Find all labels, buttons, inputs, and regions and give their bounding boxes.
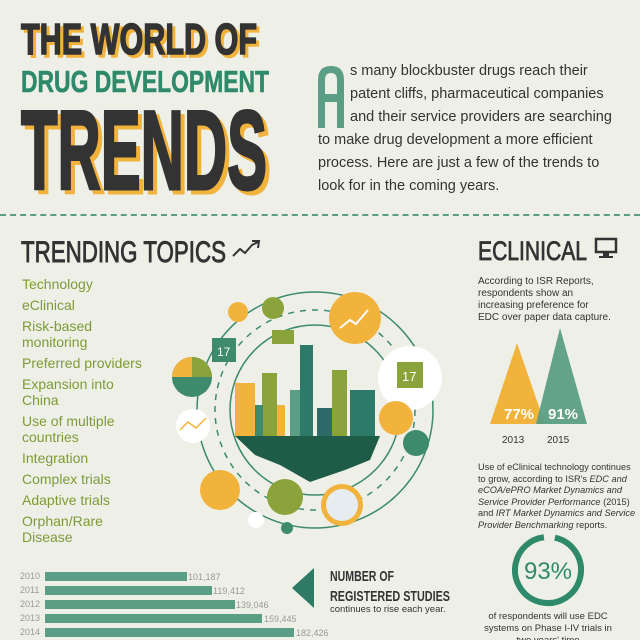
arrow [292, 568, 314, 608]
drop cap A [318, 66, 344, 128]
eClinical intro text: According to ISR Reports, respondents show an increasing preference for EDC over paper data capture. [478, 276, 611, 323]
icons [172, 292, 442, 534]
icons: 17 [402, 369, 416, 384]
bar chart registered studies: 2014 [20, 627, 40, 637]
eClinical source text: Use of eClinical technology continues to grow, according to ISR's EDC and eCOA/ePRO Market Dynamics and Service Provider Performance (2015) and IRT Market Dynamics and Service Provider Benchmarking reports. [478, 462, 635, 530]
icons: 17 [217, 345, 231, 359]
topic list: Complex trials [22, 471, 111, 487]
central illustration: city and icons [172, 291, 442, 534]
triangle chart: 77% [504, 406, 534, 423]
ring 93% [512, 534, 584, 606]
topic list: Expansion into [22, 376, 114, 392]
topic list: monitoring [22, 334, 87, 350]
bar chart registered studies: 159,445 [264, 614, 297, 624]
bar chart registered studies: 101,187 [188, 572, 221, 582]
bar chart registered studies: 182,426 [296, 628, 329, 638]
topic list: Orphan/Rare [22, 513, 103, 529]
intro paragraph: s many blockbuster drugs reach their patent cliffs, pharmaceutical companies and their service providers are searching to make drug development a more efficient process. Here are just a few of the trends to look for in the coming years. [318, 63, 612, 194]
bar chart registered studies: 139,046 [236, 600, 269, 610]
buildings [235, 345, 375, 436]
topic list: China [22, 392, 59, 408]
triangle chart: 2013 [502, 435, 525, 446]
triangle chart: 91% [548, 406, 578, 423]
topic list: Technology [22, 276, 93, 292]
heading: eClinical: ECLINICAL [478, 236, 587, 266]
bar chart registered studies: 119,412 [213, 586, 245, 596]
bar chart registered studies: 2012 [20, 599, 40, 609]
bar chart registered studies: 2011 [20, 585, 39, 595]
bar chart registered studies: 2013 [20, 613, 40, 623]
topic list: Disease [22, 529, 73, 545]
triangle chart: 2015 [547, 435, 570, 446]
title [20, 15, 271, 200]
topic list: eClinical [22, 297, 75, 313]
topic list: Adaptive trials [22, 492, 110, 508]
topic list: Use of multiple [22, 413, 115, 429]
topic list: Preferred providers [22, 355, 142, 371]
floating ground [235, 436, 380, 482]
triangle chart [490, 328, 587, 446]
bar chart registered studies: 2010 [20, 571, 40, 581]
topic list: countries [22, 429, 79, 445]
topic list: Integration [22, 450, 88, 466]
ring 93%: 93% [524, 558, 572, 585]
topic list: Risk-based [22, 318, 92, 334]
bar chart registered studies [20, 571, 329, 638]
registered studies label [330, 568, 450, 614]
registered studies label: NUMBER OF [330, 568, 394, 585]
topic list [22, 276, 142, 545]
